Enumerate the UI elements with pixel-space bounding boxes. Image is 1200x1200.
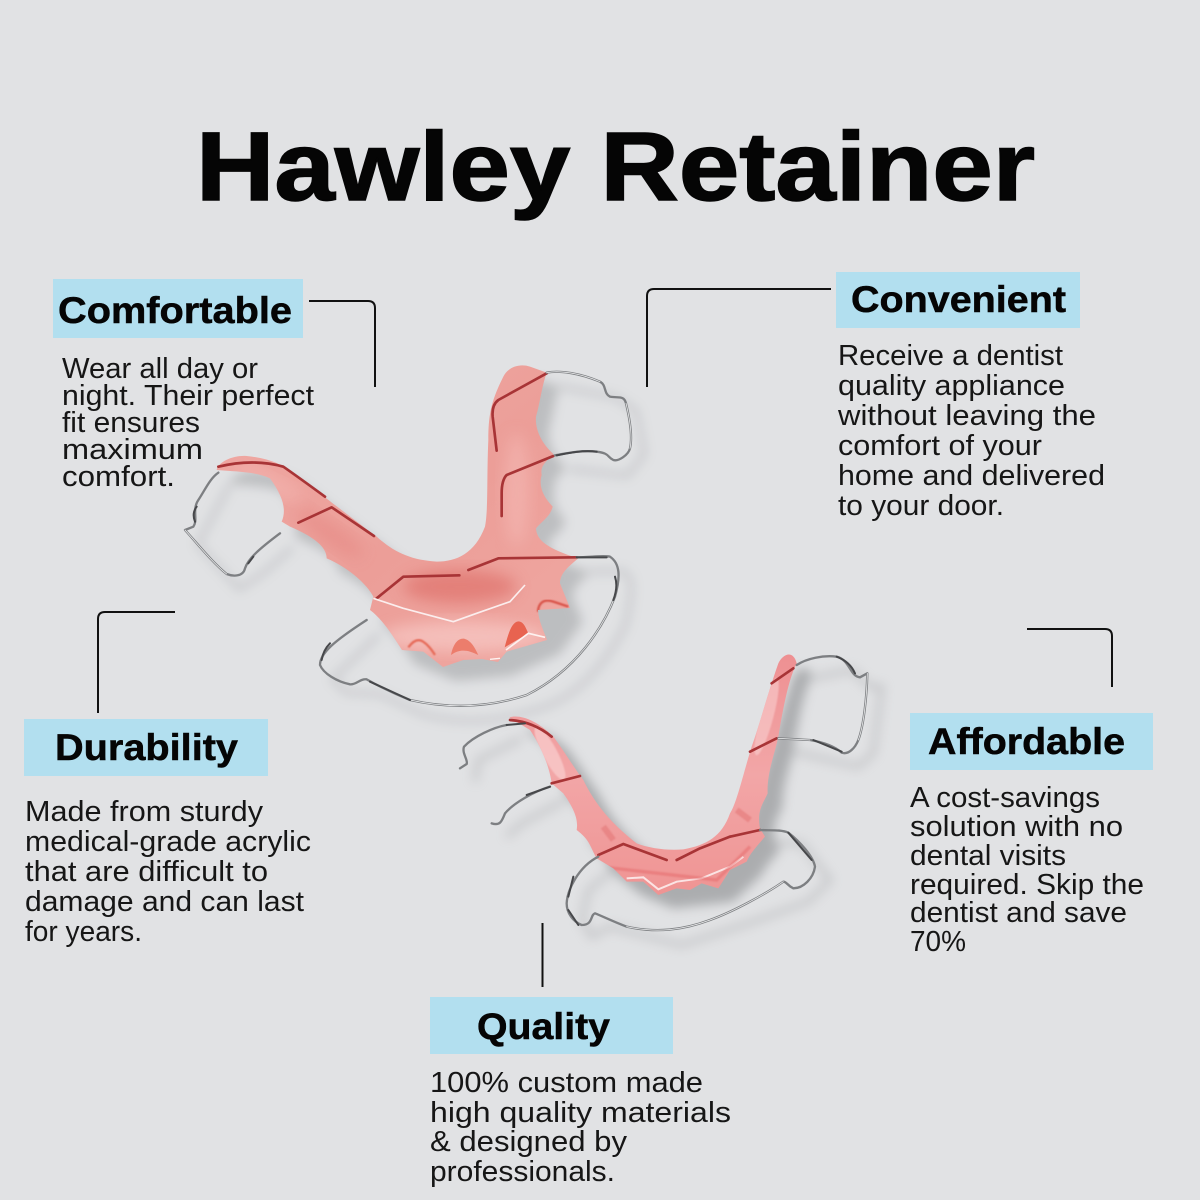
text: Durability body: that are difficult to	[25, 856, 268, 888]
panel: Durability	[24, 719, 311, 948]
text: Quality body: high quality materials	[430, 1097, 731, 1129]
text: Comfortable body	[62, 353, 314, 493]
text: Quality body: professionals.	[430, 1156, 615, 1188]
text: Comfortable body: night. Their perfect	[62, 380, 314, 412]
text: Durability body: for years.	[25, 916, 142, 948]
text: Affordable body: 70%	[910, 926, 966, 958]
text: Comfortable body: fit ensures	[62, 407, 200, 439]
text: Affordable body: required. Skip the	[910, 869, 1144, 901]
retainer illustration: lower appliance	[460, 655, 882, 945]
text: Quality body	[430, 1067, 731, 1188]
connector: Comfortable	[309, 301, 375, 387]
text: Convenient body: quality appliance	[838, 370, 1065, 402]
text: Convenient body: without leaving the	[837, 400, 1096, 432]
connector: Durability	[98, 612, 175, 713]
retainer illustration: upper appliance	[185, 365, 644, 721]
text: Quality body: & designed by	[430, 1126, 628, 1158]
heading: Affordable: Affordable	[928, 721, 1125, 762]
text: Comfortable body: maximum	[62, 434, 203, 466]
embedded wire tags	[218, 373, 577, 622]
shadow of lower appliance	[475, 668, 882, 945]
text: Durability body: damage and can last	[25, 886, 304, 918]
wire clasps and labial bow	[460, 656, 867, 930]
heading: Quality	[430, 997, 673, 1054]
heading: Convenient	[836, 272, 1080, 328]
text: Convenient body: to your door.	[838, 490, 1004, 522]
heading: Comfortable: Comfortable	[58, 290, 292, 331]
text: Durability body: Made from sturdy	[25, 796, 264, 828]
connector: Convenient	[647, 289, 831, 387]
panel: Quality	[430, 997, 731, 1188]
text: Quality body: 100% custom made	[430, 1067, 703, 1099]
embedded wire tags	[510, 668, 793, 860]
connector: Affordable	[1027, 629, 1112, 687]
text: Comfortable body: comfort.	[62, 461, 175, 493]
text: Convenient body: Receive a dentist	[838, 340, 1063, 372]
text: Convenient body: comfort of your	[838, 430, 1043, 462]
connector: Quality	[542, 923, 544, 987]
text: Comfortable body: Wear all day or	[62, 353, 259, 385]
shadow of upper appliance	[198, 379, 644, 721]
heading: Convenient: Convenient	[851, 279, 1066, 320]
text: Affordable body: A cost-savings	[910, 782, 1100, 814]
heading: Durability	[24, 719, 268, 776]
heading: Quality: Quality	[477, 1006, 610, 1047]
panel: Convenient	[836, 272, 1105, 522]
text: Durability body: medical-grade acrylic	[25, 826, 311, 858]
text: Affordable body	[910, 782, 1144, 958]
text: Affordable body: dentist and save	[910, 897, 1127, 929]
panel: Comfortable	[53, 279, 314, 493]
panel: Affordable	[910, 713, 1153, 958]
title: Hawley Retainer	[196, 112, 1035, 221]
wire clasps and labial bow	[185, 372, 631, 706]
text: Durability body	[25, 796, 311, 948]
text: Convenient body: home and delivered	[838, 460, 1105, 492]
text: Affordable body: solution with no	[910, 811, 1123, 843]
plate shading	[529, 676, 783, 889]
heading: Affordable	[910, 713, 1153, 770]
plate shading and tooth arches	[233, 433, 568, 659]
acrylic plate	[217, 365, 578, 667]
heading: Comfortable	[53, 279, 303, 338]
acrylic plate	[509, 655, 797, 895]
text: Affordable body: dental visits	[910, 840, 1066, 872]
heading: Durability: Durability	[55, 727, 238, 768]
text: Convenient body	[837, 340, 1105, 522]
